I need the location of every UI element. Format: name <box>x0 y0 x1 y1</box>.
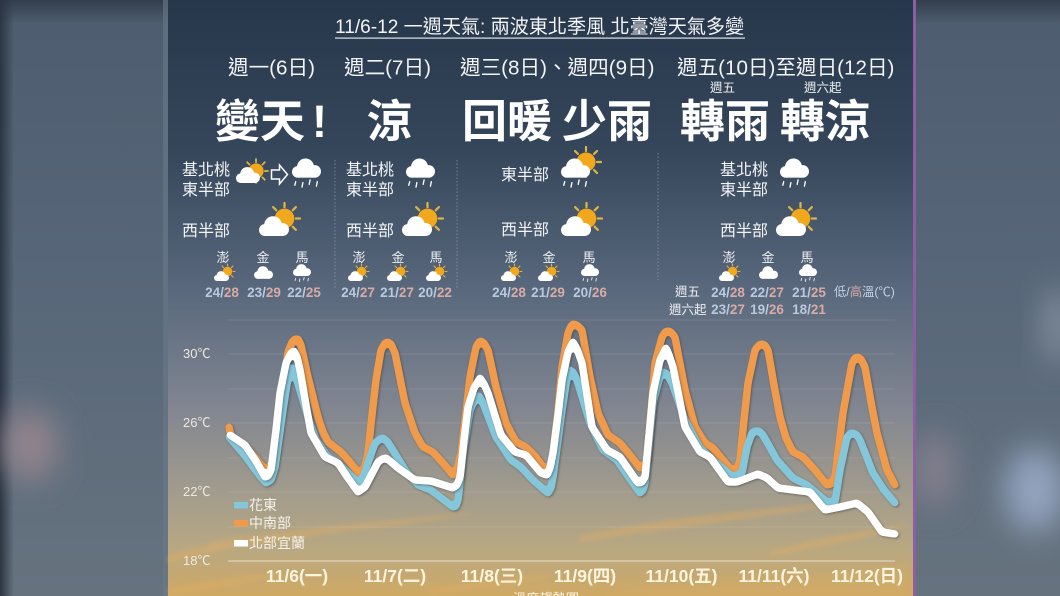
panel: Tuesday forecast <box>341 159 452 300</box>
weekly summary headlines: 轉涼 <box>780 96 870 147</box>
panel: Tuesday forecast: 西半部 <box>346 222 394 240</box>
outlying islands: 澎 <box>722 250 736 265</box>
outlying islands: 24/28 <box>711 285 745 300</box>
outlying islands: 18/21 <box>792 302 826 317</box>
outlying islands <box>205 250 321 300</box>
panel: Monday forecast: 基北桃 <box>182 161 230 179</box>
temperature unit note: 低/高溫(℃) <box>834 284 895 299</box>
outlying islands: 23/27 <box>711 302 745 317</box>
panel: Wednesday and Thursday forecast: 東半部 <box>501 166 549 184</box>
day headings: 週五(10日)至週日(12日) <box>677 56 894 80</box>
x axis date labels: 11/11(六) <box>738 566 810 586</box>
outlying islands: 金 <box>391 250 405 265</box>
panel: Wednesday and Thursday forecast: 西半部 <box>501 221 549 239</box>
outlying islands: 澎 <box>352 250 366 265</box>
series: 花東 <box>229 368 895 507</box>
outlying islands <box>341 250 452 300</box>
panel: Monday forecast: 西半部 <box>182 222 230 240</box>
icon: sun behind cloud to rain <box>236 159 321 187</box>
outlying islands: 20/22 <box>418 285 452 300</box>
outlying islands: 澎 <box>504 250 518 265</box>
outlying islands: 馬 <box>582 250 596 265</box>
x axis date labels: 11/6(一) <box>266 566 328 586</box>
x axis date labels: 11/12(日) <box>831 566 903 586</box>
line chart: temperature trends <box>183 320 903 586</box>
outlying islands: 21/25 <box>792 285 826 300</box>
legend <box>234 497 305 551</box>
y axis labels: 22℃ <box>183 484 210 499</box>
series: 北部宜蘭 <box>230 342 895 534</box>
outlying islands: 週五 <box>675 284 700 299</box>
icon: rain cloud <box>780 159 809 187</box>
outlying islands: 金 <box>761 250 775 265</box>
y axis labels: 30℃ <box>183 346 210 361</box>
icon: sun, cloud and rain <box>561 147 601 187</box>
day headings: 週二(7日) <box>344 56 431 80</box>
outlying islands: 21/29 <box>531 285 565 300</box>
panel: Tuesday forecast: 基北桃 <box>346 161 394 179</box>
weekly summary headlines: 週五 <box>710 80 735 95</box>
outlying islands: 週六起 <box>669 302 707 317</box>
outlying islands: 澎 <box>216 250 230 265</box>
title: 11/6-12 一週天氣: 兩波東北季風 北臺灣天氣多變 <box>335 16 744 38</box>
outlying islands: 馬 <box>800 250 814 265</box>
weekly summary headlines: 回暖 <box>462 96 552 147</box>
outlying islands: 22/25 <box>287 285 321 300</box>
outlying islands: 金 <box>542 250 556 265</box>
x axis date labels: 11/9(四) <box>554 566 616 586</box>
weekly summary headlines: 變天! <box>215 96 327 147</box>
panel: Friday to Sunday forecast: 基北桃 <box>720 161 768 179</box>
outlying islands: 23/29 <box>247 285 281 300</box>
panel: Monday forecast <box>182 159 321 300</box>
legend: 中南部 <box>249 515 291 531</box>
icon: west partly cloudy <box>561 203 602 236</box>
icon: west partly cloudy <box>259 203 300 236</box>
day headings: 週三(8日)、週四(9日) <box>460 56 654 80</box>
legend: 花東 <box>249 497 277 513</box>
panel: Monday forecast: 東半部 <box>182 181 230 199</box>
outlying islands: 21/27 <box>380 285 414 300</box>
panel: Tuesday forecast: 東半部 <box>346 181 394 199</box>
panel: Friday to Sunday forecast: 西半部 <box>720 222 768 240</box>
outlying islands: 24/27 <box>341 285 375 300</box>
x axis date labels: 11/8(三) <box>461 566 523 586</box>
legend: 北部宜蘭 <box>249 535 305 551</box>
outlying islands: 19/26 <box>750 302 784 317</box>
outlying islands: 24/28 <box>492 285 526 300</box>
panel: Wednesday and Thursday forecast <box>492 147 607 300</box>
outlying islands: 22/27 <box>750 285 784 300</box>
outlying islands: 20/26 <box>573 285 607 300</box>
outlying islands: 24/28 <box>205 285 239 300</box>
weekly summary headlines: 轉雨 <box>680 96 770 147</box>
column dividers <box>335 153 658 288</box>
weekly summary headlines <box>215 80 870 147</box>
outlying islands <box>669 250 895 317</box>
y axis labels <box>183 346 210 568</box>
weekly summary headlines: 週六起 <box>804 80 842 95</box>
x axis date labels: 11/7(二) <box>364 566 426 586</box>
y axis labels: 18℃ <box>183 553 210 568</box>
day headings <box>228 56 894 80</box>
x axis date labels <box>266 566 903 586</box>
series: 中南部 <box>229 324 895 485</box>
icon: rain cloud <box>406 159 435 187</box>
outlying islands <box>492 250 607 300</box>
weekly summary headlines: 涼 <box>367 96 412 147</box>
x axis date labels: 11/10(五) <box>646 566 717 586</box>
outlying islands: 馬 <box>295 250 309 265</box>
y axis labels: 26℃ <box>183 415 210 430</box>
panel: Friday to Sunday forecast: 東半部 <box>720 181 768 199</box>
panel: Friday to Sunday forecast <box>669 159 895 317</box>
outlying islands: 金 <box>256 250 270 265</box>
icon: west partly cloudy <box>402 203 443 236</box>
sky background panel <box>163 0 916 596</box>
weekly summary headlines: 少雨 <box>562 96 652 147</box>
icon: west partly cloudy <box>776 203 816 236</box>
day headings: 週一(6日) <box>228 56 315 80</box>
outlying islands: 馬 <box>429 250 443 265</box>
